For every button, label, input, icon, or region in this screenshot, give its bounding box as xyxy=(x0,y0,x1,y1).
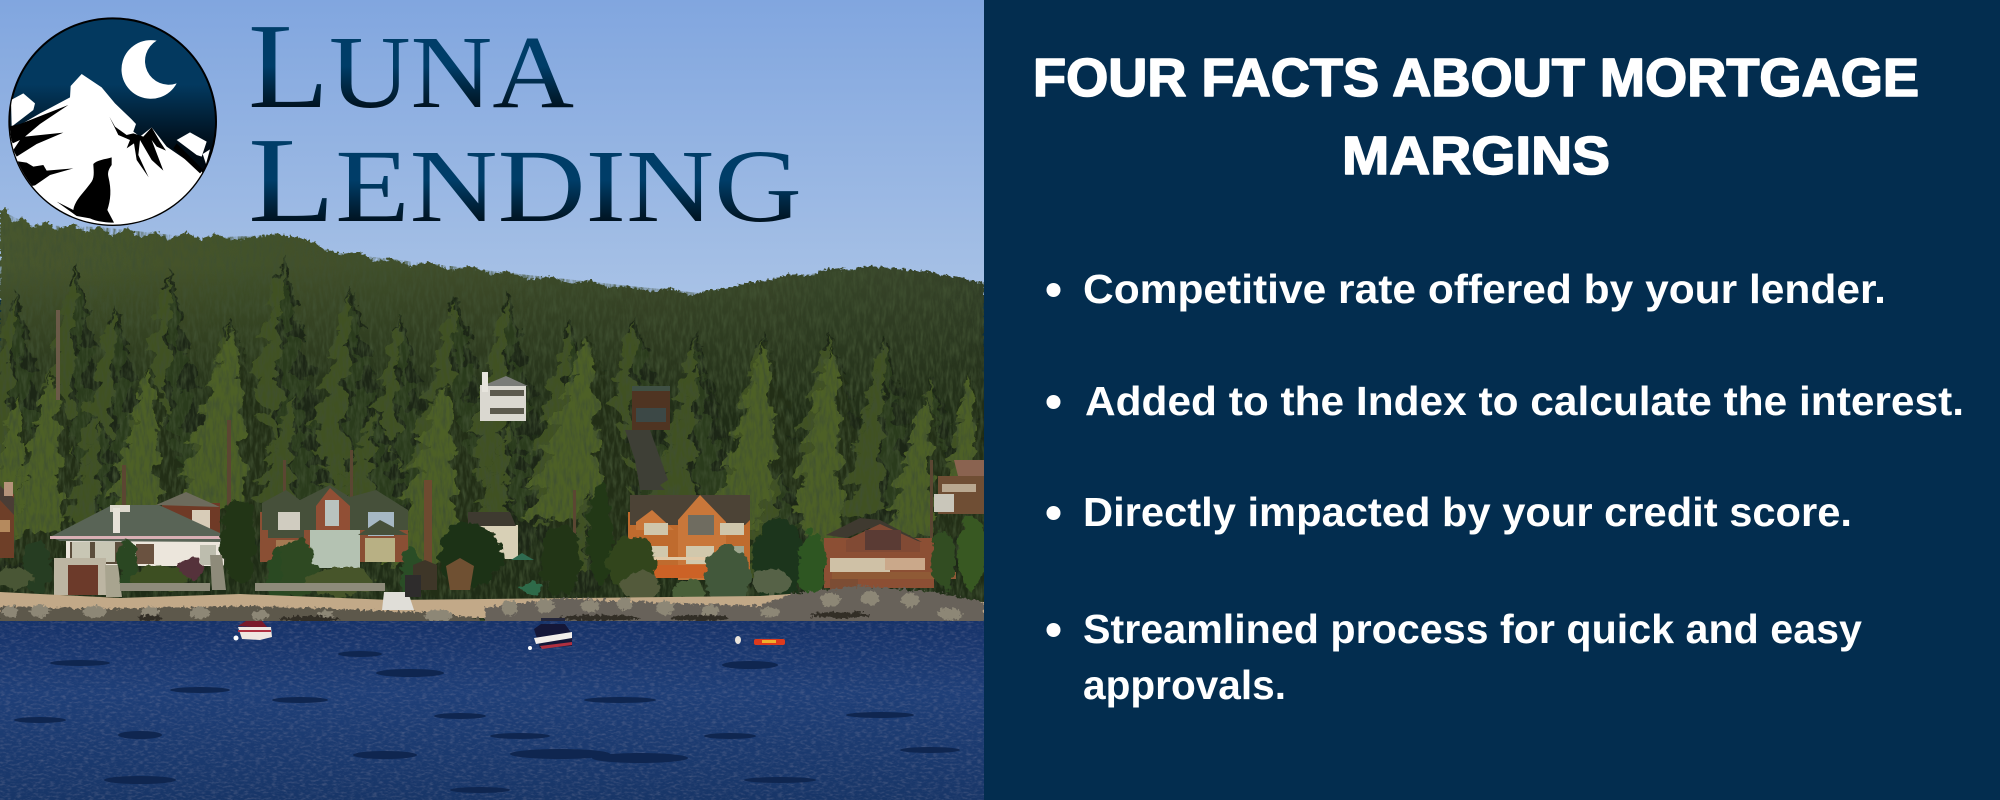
forested ridge xyxy=(0,208,984,640)
water texture xyxy=(0,621,984,800)
cliff rock xyxy=(625,430,668,490)
fact 1: Competitive rate offered by your lender. xyxy=(1083,266,1886,312)
main orange house xyxy=(628,495,750,580)
logo wordmark: Luna Lending xyxy=(248,0,802,248)
fact 3: Directly impacted by your credit score. xyxy=(1083,489,1852,535)
rear conifer trees xyxy=(0,254,984,544)
wordmark line: Lending: LENDING xyxy=(248,113,802,248)
fact 4 xyxy=(1046,606,1862,708)
white house on hillside xyxy=(480,372,528,421)
crescent moon xyxy=(122,40,177,99)
right brown deck house xyxy=(824,518,956,594)
shrubs and garden xyxy=(0,485,986,606)
fact 4: approvals. xyxy=(1083,662,1286,708)
panel: lakeside photo scene xyxy=(0,0,1005,800)
white lakeside house xyxy=(50,505,233,566)
far right brown house xyxy=(934,460,984,514)
boat: red and white xyxy=(234,621,272,640)
tree silhouettes left xyxy=(8,105,68,157)
lake water xyxy=(0,621,984,800)
dog silhouette xyxy=(57,157,114,223)
fact list xyxy=(1046,266,1964,708)
white boat at dock xyxy=(382,575,421,610)
title xyxy=(1033,48,1919,186)
left edge house xyxy=(0,482,14,558)
rocky shoreline xyxy=(0,586,984,624)
rear brown house xyxy=(156,492,220,533)
title: MARGINS xyxy=(1342,126,1610,186)
front conifer trees xyxy=(0,325,1000,595)
buoy and red float xyxy=(735,636,785,645)
logo: moon, mountain and dog badge xyxy=(8,18,220,233)
brown house on hillside xyxy=(632,386,670,430)
forest texture xyxy=(0,205,984,625)
snowy peaks xyxy=(10,74,202,225)
dead tree and trunks xyxy=(56,310,933,570)
water ripples xyxy=(14,651,960,793)
wordmark line: Luna: LUNA xyxy=(248,0,574,134)
fact 2: Added to the Index to calculate the interest. xyxy=(1085,378,1964,424)
stone retaining wall xyxy=(120,555,385,591)
branch silhouettes xyxy=(109,117,166,177)
garage with door xyxy=(54,558,122,597)
panel: four facts xyxy=(1033,48,1964,708)
boat: navy and white xyxy=(528,618,572,650)
sandy beach xyxy=(0,592,984,620)
fact 4: Streamlined process for quick and easy xyxy=(1083,606,1862,652)
sky xyxy=(0,0,984,300)
forest base xyxy=(0,265,984,620)
badge disc xyxy=(9,18,216,225)
tiki shelters xyxy=(413,553,534,590)
cream house behind trees xyxy=(468,512,518,559)
title: FOUR FACTS ABOUT MORTGAGE xyxy=(1033,48,1919,108)
brown lakeside house xyxy=(260,485,408,568)
